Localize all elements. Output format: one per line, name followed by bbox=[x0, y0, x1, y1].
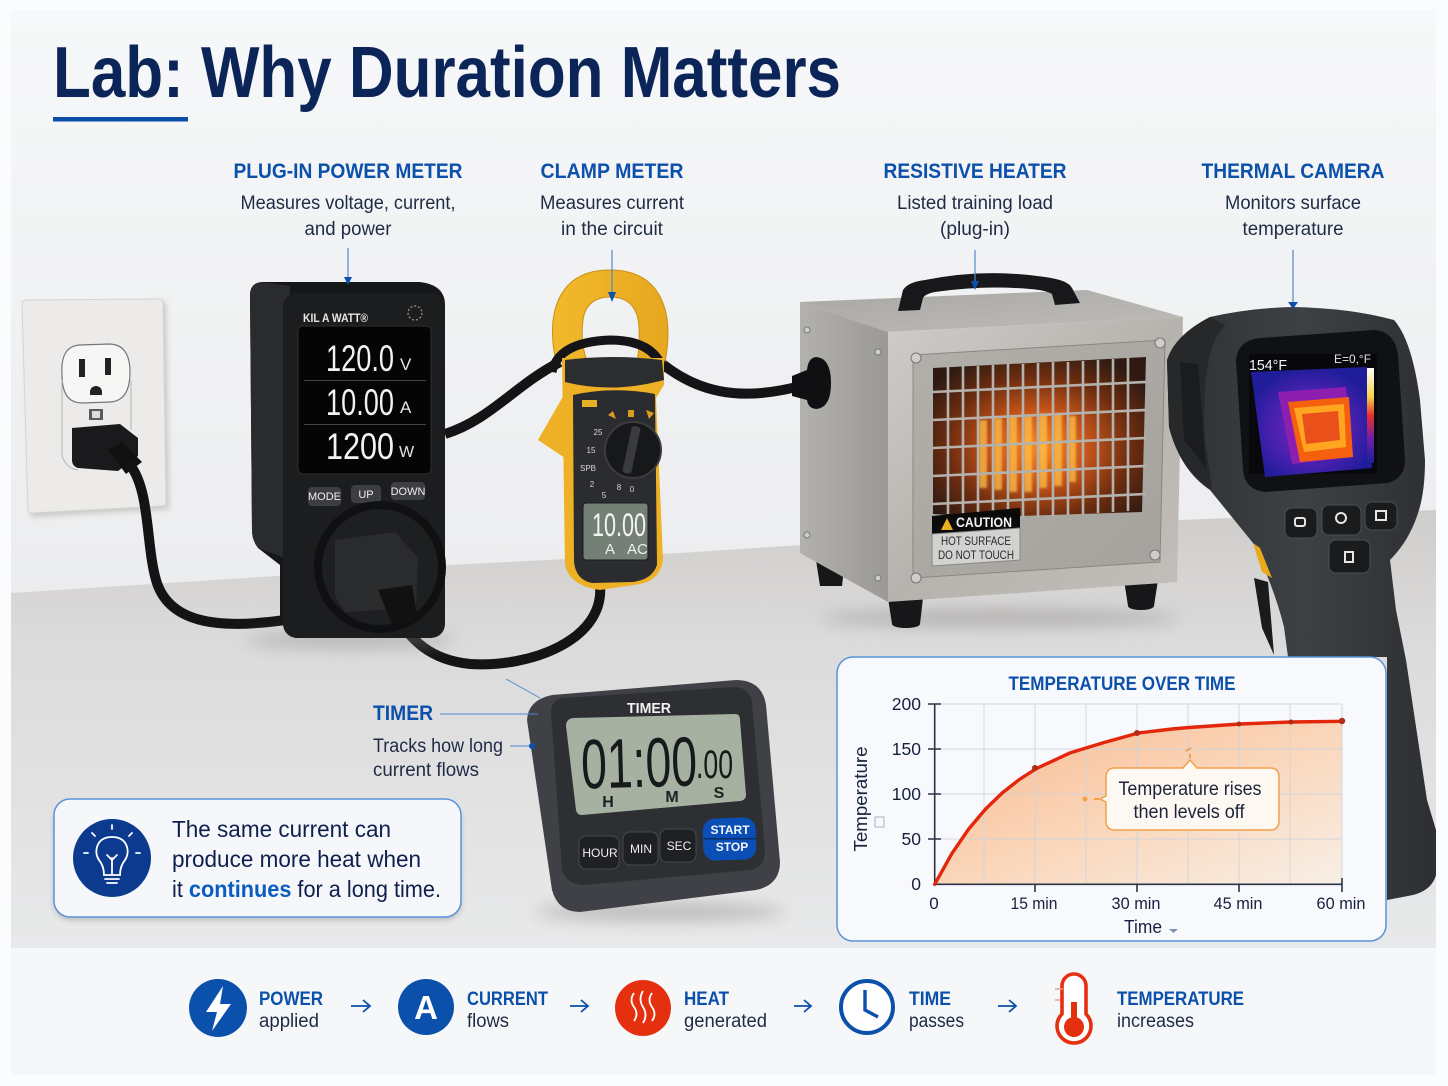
callout: key takeaway bbox=[54, 799, 461, 920]
flow: power applied: applied bbox=[259, 1011, 319, 1032]
flow: time passes bbox=[841, 981, 964, 1033]
panel: temperature over time chart bbox=[837, 657, 1386, 941]
icon: heat waves bbox=[615, 980, 671, 1036]
clamp meter: 15 bbox=[587, 446, 596, 455]
power meter: 1200 bbox=[326, 426, 394, 467]
clamp meter: A bbox=[605, 541, 615, 558]
timer label and leaders: TIMER bbox=[373, 702, 433, 725]
timer: M bbox=[665, 789, 679, 806]
clamp meter: 2 bbox=[590, 480, 595, 489]
cable: outlet to power meter bbox=[130, 465, 285, 624]
heater bbox=[792, 273, 1183, 628]
chart callout bbox=[1082, 748, 1279, 830]
leader arrow: power meter bbox=[344, 248, 352, 285]
label: clamp meter: Measures current bbox=[540, 193, 685, 214]
timer bbox=[527, 680, 780, 912]
clamp meter bbox=[538, 270, 668, 590]
timer: S bbox=[714, 785, 725, 802]
label: resistive heater bbox=[884, 160, 1066, 240]
chart x-axis tick labels: 30 min bbox=[1112, 894, 1160, 913]
label: clamp meter: CLAMP METER bbox=[540, 160, 684, 183]
label: clamp meter: in the circuit bbox=[561, 219, 664, 240]
clamp meter: 25 bbox=[594, 428, 603, 437]
chart callout: Temperature rises bbox=[1118, 779, 1262, 800]
title: Lab: Why Duration Matters bbox=[53, 33, 841, 113]
icon: lightning bolt bbox=[189, 979, 247, 1037]
panel: temperature over time chart: TEMPERATURE OVER TIME bbox=[1008, 673, 1236, 695]
flow: heat generated: generated bbox=[684, 1011, 767, 1032]
cable: clamp meter around to power meter plug bbox=[392, 585, 600, 664]
cable: power meter to clamp meter bbox=[445, 362, 560, 434]
clamp meter: 10.00 bbox=[592, 507, 646, 543]
flow: heat generated bbox=[615, 980, 767, 1036]
timer: TIMER bbox=[627, 701, 672, 717]
label: thermal camera: temperature bbox=[1242, 219, 1344, 240]
label: resistive heater: Listed training load bbox=[897, 193, 1053, 214]
label: thermal camera: Monitors surface bbox=[1225, 193, 1361, 214]
timer label and leaders bbox=[373, 679, 540, 781]
label: resistive heater: RESISTIVE HEATER bbox=[884, 160, 1066, 183]
power meter: W bbox=[399, 444, 415, 461]
power meter: KIL A WATT® bbox=[303, 311, 368, 325]
chart y-axis tick labels: 50 bbox=[902, 829, 921, 849]
chart y-axis tick labels: 100 bbox=[892, 784, 921, 804]
callout: key takeaway: The same current can bbox=[172, 816, 391, 842]
power meter: 120.0 bbox=[326, 338, 394, 379]
label: thermal camera: THERMAL CAMERA bbox=[1202, 160, 1384, 183]
chart axis titles: Time bbox=[1124, 916, 1162, 937]
label: plug-in power meter bbox=[234, 160, 462, 240]
flow: power applied: POWER bbox=[259, 988, 323, 1010]
chart x-axis tick labels: 0 bbox=[929, 894, 939, 913]
leader arrow: clamp meter bbox=[608, 250, 616, 302]
flow: temperature increases bbox=[1055, 974, 1244, 1043]
leader arrow: heater bbox=[971, 250, 979, 290]
clamp meter: AC bbox=[627, 541, 648, 558]
chart y-axis tick labels: 150 bbox=[892, 739, 921, 759]
heater: DO NOT TOUCH bbox=[938, 548, 1014, 562]
chart x-axis tick labels: 15 min bbox=[1010, 894, 1058, 913]
clamp meter: SPB bbox=[580, 464, 596, 473]
flow: heat generated: HEAT bbox=[684, 988, 729, 1010]
timer: 01:00 bbox=[580, 723, 698, 804]
chart callout: then levels off bbox=[1134, 802, 1245, 823]
chart temperature curve bbox=[935, 718, 1345, 884]
icon: ammeter A: A bbox=[414, 989, 438, 1026]
heater: HOT SURFACE bbox=[941, 534, 1011, 548]
label: thermal camera bbox=[1202, 160, 1384, 240]
icon: ammeter A bbox=[398, 979, 454, 1035]
bottom strip background bbox=[11, 948, 1436, 1075]
chart y-axis tick labels: 200 bbox=[892, 694, 921, 714]
flow: power applied bbox=[189, 979, 323, 1037]
flow: time passes: passes bbox=[909, 1011, 964, 1032]
chart x-axis tick labels bbox=[929, 894, 1366, 913]
table shadows bbox=[245, 609, 1180, 921]
chart x-axis tick labels: 60 min bbox=[1316, 894, 1366, 913]
timer: .00 bbox=[696, 743, 733, 787]
clamp meter: 0 bbox=[630, 485, 635, 494]
callout: key takeaway: produce more heat when bbox=[172, 846, 421, 872]
thermal camera: E=0,°F bbox=[1334, 352, 1371, 366]
icon: light bulb bbox=[73, 819, 151, 897]
cable: clamp meter to heater bbox=[660, 362, 808, 394]
clamp meter: 5 bbox=[602, 491, 607, 500]
label: resistive heater: (plug-in) bbox=[940, 219, 1010, 240]
power meter: UP bbox=[358, 489, 374, 501]
arrow bbox=[998, 1000, 1016, 1012]
timer label and leaders: current flows bbox=[373, 760, 479, 781]
chart area fill bbox=[935, 721, 1342, 884]
timer: STOP bbox=[716, 840, 748, 854]
label: plug-in power meter: Measures voltage, current, bbox=[240, 193, 456, 214]
icon: clock bbox=[841, 981, 893, 1033]
power meter bbox=[250, 282, 446, 638]
timer: H bbox=[602, 794, 614, 811]
icon: thermometer bbox=[1055, 974, 1091, 1043]
arrow bbox=[351, 1000, 370, 1012]
flow: current flows bbox=[398, 979, 548, 1035]
chart x-axis tick labels: 45 min bbox=[1214, 894, 1262, 913]
timer label and leaders: Tracks how long bbox=[373, 736, 503, 757]
power meter: V bbox=[400, 355, 412, 374]
callout: key takeaway: it continues for a long time. bbox=[172, 876, 441, 902]
chart y-axis tick labels: 0 bbox=[911, 874, 921, 894]
chart axis titles bbox=[851, 746, 1178, 937]
chart grid bbox=[934, 704, 1342, 884]
flow: temperature increases: increases bbox=[1117, 1011, 1194, 1032]
thermal camera: 154°F bbox=[1249, 357, 1287, 374]
label: clamp meter bbox=[540, 160, 685, 240]
wall outlet with plug bbox=[22, 299, 169, 517]
arrow bbox=[794, 1000, 811, 1012]
timer: START bbox=[710, 823, 750, 837]
flow: time passes: TIME bbox=[909, 988, 951, 1010]
power meter: 10.00 bbox=[326, 382, 394, 423]
flow: current flows: flows bbox=[467, 1011, 509, 1032]
chart axes bbox=[928, 704, 1342, 892]
chart y-axis tick labels bbox=[892, 694, 921, 894]
label: plug-in power meter: PLUG-IN POWER METER bbox=[234, 160, 462, 183]
thermal camera bbox=[1167, 250, 1436, 900]
arrow bbox=[570, 1000, 588, 1012]
power meter: A bbox=[400, 398, 412, 417]
timer: SEC bbox=[667, 839, 692, 853]
heater: CAUTION bbox=[956, 515, 1012, 530]
power meter: DOWN bbox=[391, 486, 425, 498]
label: plug-in power meter: and power bbox=[304, 219, 392, 240]
timer: MIN bbox=[630, 842, 652, 856]
flow: current flows: CURRENT bbox=[467, 988, 548, 1010]
flow: temperature increases: TEMPERATURE bbox=[1117, 988, 1244, 1010]
chart axis titles: Temperature bbox=[851, 746, 871, 852]
power meter: MODE bbox=[308, 491, 341, 503]
timer: HOUR bbox=[582, 846, 618, 860]
clamp meter: 8 bbox=[617, 483, 622, 492]
